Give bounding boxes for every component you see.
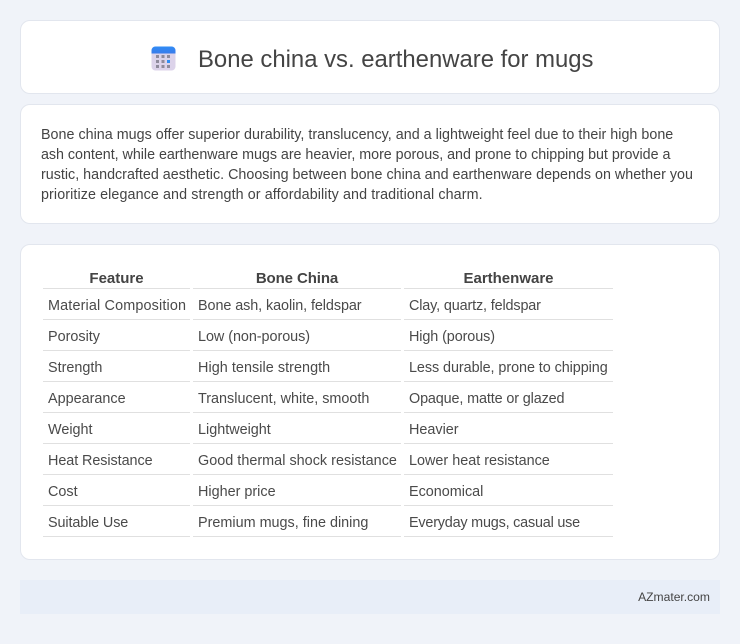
row: weight [48,422,459,438]
row: suitable use: Premium mugs, fine dining [198,515,368,531]
row: strength [48,360,608,376]
row: porosity: High (porous) [409,329,495,345]
row: weight: Weight [48,422,93,438]
icon: calendar [152,46,176,70]
summary text: prioritize elegance and strength or affordability and traditional charm. [41,187,483,203]
row: appearance: Appearance [48,391,126,407]
table header: Bone China [256,270,338,287]
summary text: rustic, handcrafted aesthetic. Choosing between bone china and earthenware depends on whether you [41,167,693,183]
row: strength: Less durable, prone to chipping [409,360,608,376]
footer bar [20,580,720,614]
row: porosity: Porosity [48,329,100,345]
footer brand: AZmater.com [638,590,710,604]
summary text [41,127,693,203]
row: weight: Heavier [409,422,459,438]
row: material composition: Clay, quartz, feldspar [409,298,541,314]
row: cost: Economical [409,484,483,500]
summary text: ash content, while earthenware mugs are heavier, more porous, and prone to chipping but provide a [41,147,670,163]
title card [20,20,720,94]
summary text: Bone china mugs offer superior durability, translucency, and a lightweight feel due to their high bone [41,127,673,143]
row: appearance: Opaque, matte or glazed [409,391,564,407]
table header: Feature [89,270,144,287]
row: heat resistance [48,453,550,469]
comparison table [43,270,613,537]
row: appearance [48,391,564,407]
row: heat resistance: Good thermal shock resistance [198,453,397,469]
row: suitable use [48,515,580,531]
row: cost: Cost [48,484,78,500]
row: porosity: Low (non-porous) [198,329,310,345]
summary panel [20,104,720,224]
row: material composition: Material Composition [48,298,186,314]
row: suitable use: Everyday mugs, casual use [409,515,580,531]
row: material composition: Bone ash, kaolin, feldspar [198,298,362,314]
row: cost: Higher price [198,484,276,500]
row: strength: Strength [48,360,102,376]
row: material composition [48,298,541,314]
row: cost [48,484,483,500]
table header: Earthenware [463,270,554,287]
title: Bone china vs. earthenware for mugs [198,46,593,73]
row: suitable use: Suitable Use [48,515,128,531]
table header [89,270,554,287]
row: strength: High tensile strength [198,360,330,376]
row: weight: Lightweight [198,422,271,438]
row: porosity [48,329,495,345]
row: heat resistance: Lower heat resistance [409,453,550,469]
comparison table panel [20,244,720,560]
row: appearance: Translucent, white, smooth [198,391,369,407]
row: heat resistance: Heat Resistance [48,453,153,469]
